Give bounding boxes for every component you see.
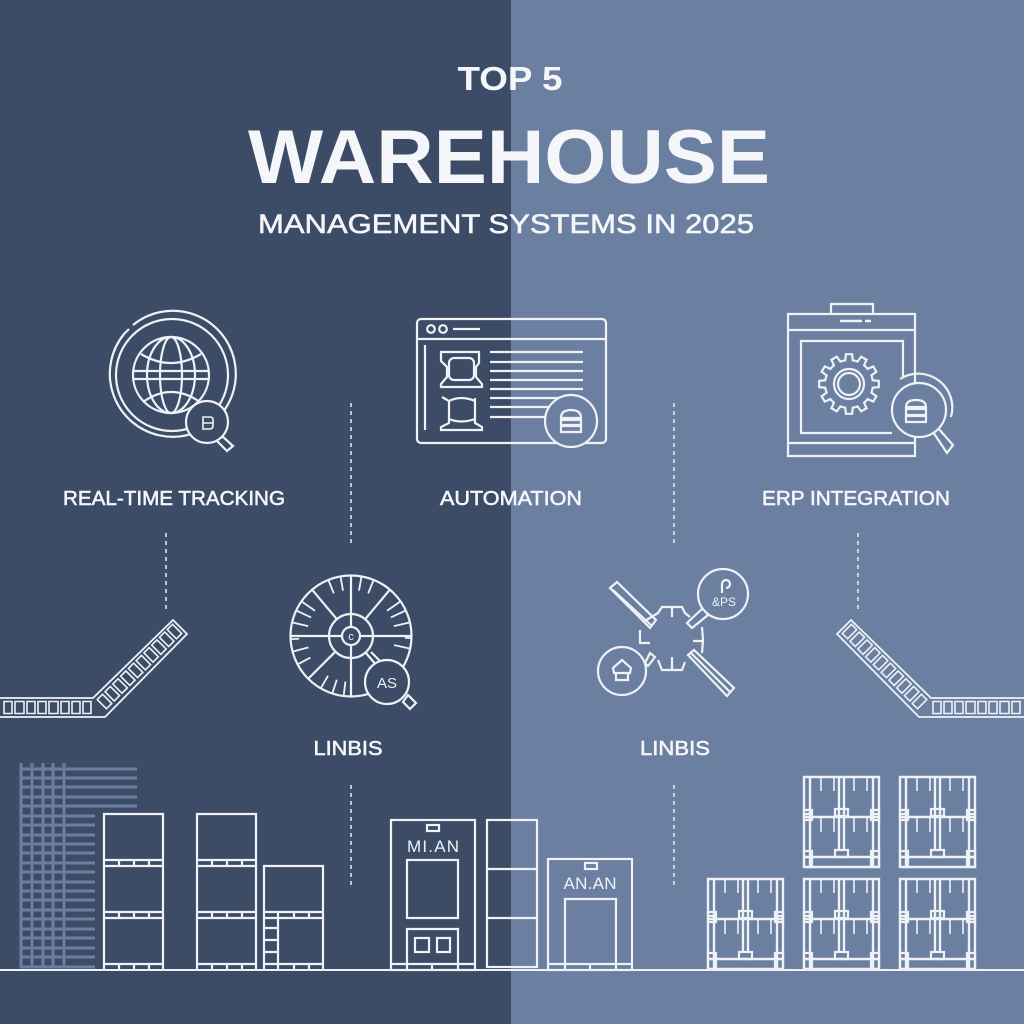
faded blue scaffold grid (21, 763, 137, 968)
icon: left conveyor (0, 620, 187, 717)
building: secondary: AN.AN (564, 874, 616, 893)
subtitle: MANAGEMENT SYSTEMS IN 2025 (258, 209, 754, 239)
icon: globe with magnifier (110, 311, 236, 451)
label: linbis left: LINBIS (314, 738, 382, 760)
shelf unit 1 (104, 814, 163, 970)
label: automation: AUTOMATION (440, 488, 582, 510)
icon: radial wheel with magnifier: c (348, 631, 354, 643)
central shelf (487, 820, 537, 967)
title: top 5: TOP 5 (458, 60, 562, 97)
dashed connectors (166, 403, 858, 886)
icon: radial wheel with magnifier: AS (377, 675, 397, 692)
rack: top middle (803, 776, 880, 868)
background: right light panel (511, 0, 1024, 1024)
rack: top right (899, 776, 976, 868)
icon: ERP panel with gear and magnifier (788, 304, 953, 456)
ground line (0, 969, 1024, 971)
label: linbis right: LINBIS (640, 738, 710, 760)
rack: bottom right (899, 878, 976, 970)
shelf unit 3 with ladder (264, 866, 323, 970)
rack: bottom left (707, 878, 784, 970)
pallet racks (707, 776, 976, 970)
icon: right conveyor (837, 620, 1024, 717)
rack: bottom middle (803, 878, 880, 970)
building: main (391, 820, 475, 970)
icon: radial wheel with magnifier (290, 576, 416, 709)
building: secondary (548, 859, 632, 970)
title block (248, 60, 770, 239)
label: real-time tracking: REAL-TIME TRACKING (63, 488, 285, 510)
shelf unit 2 (197, 814, 256, 970)
label: erp integration: ERP INTEGRATION (762, 488, 950, 510)
icon: hub with two magnifiers: &PS (712, 595, 736, 609)
title: warehouse: WAREHOUSE (248, 115, 770, 200)
icon: hub with two magnifiers (598, 569, 748, 696)
building: main: MI.AN (407, 837, 459, 856)
background: left dark panel (0, 0, 511, 1024)
icon: automation software window (417, 319, 606, 447)
